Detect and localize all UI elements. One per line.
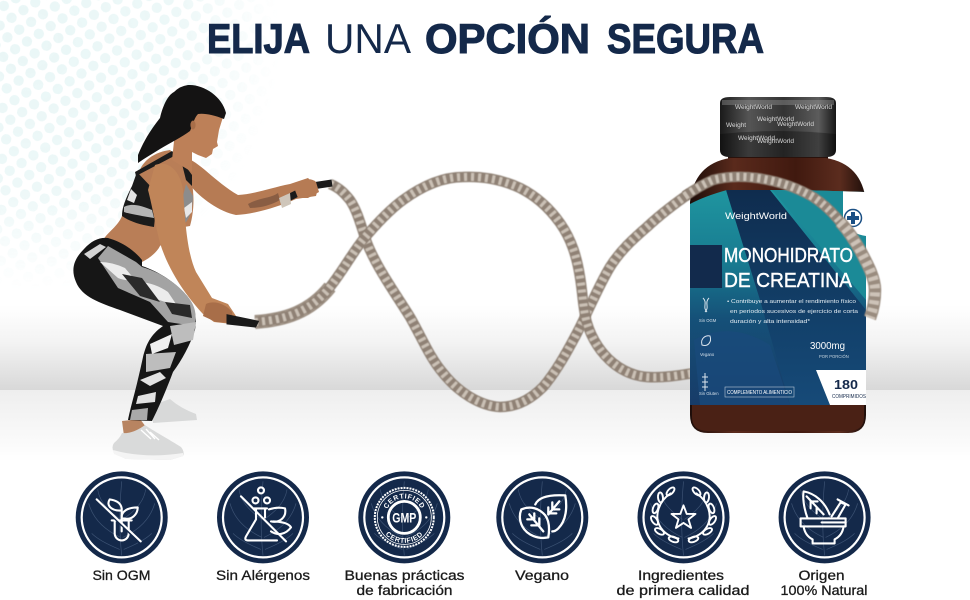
bottle text: COMPLEMENTO ALIMENTICIO	[727, 390, 792, 396]
bottle text: duración y alta intensidad*	[730, 319, 811, 325]
bottle text: Vegano	[700, 352, 715, 357]
bottle glass	[690, 158, 866, 433]
label: Buenas prácticas de fabricación: Buenas prácticas	[344, 568, 465, 583]
label: Sin Alérgenos: Sin Alérgenos	[216, 568, 310, 583]
rope: section crossing over the bottle	[685, 177, 875, 318]
icon: test tube with leaves crossed out	[96, 499, 141, 542]
torso	[103, 150, 193, 262]
rope grips	[228, 316, 257, 326]
bottle label	[690, 188, 866, 406]
hand on lower rope	[203, 302, 233, 323]
label: Ingredientes de primera calidad: de primera calidad	[616, 583, 750, 598]
bottle cap	[720, 97, 836, 164]
badge: Sin Alérgenos	[218, 473, 308, 562]
hand on upper rope	[293, 179, 319, 198]
title	[207, 15, 764, 62]
sports bra	[122, 151, 193, 227]
bottle text: 3000mg	[810, 341, 845, 352]
label: Origen 100% Natural: Origen	[798, 568, 844, 583]
rope: strand from upper hand, behind the other strand	[330, 184, 690, 407]
leggings	[73, 238, 196, 421]
front shoe	[112, 419, 184, 460]
badge: Ingredientes de primera calidad	[639, 473, 728, 562]
lower arm	[148, 164, 236, 324]
title: ELIJA	[207, 15, 310, 62]
back shoe	[153, 399, 197, 423]
label: Sin OGM: Sin OGM	[92, 568, 150, 583]
bottle text: Sin OGM	[699, 318, 717, 323]
badge: Vegano	[498, 473, 587, 562]
badge: Origen 100% Natural	[780, 473, 869, 562]
label: Ingredientes de primera calidad: Ingredientes	[638, 568, 724, 583]
bottle cap: WeightWorld	[738, 135, 775, 142]
badge: Buenas prácticas de fabricación	[358, 471, 450, 564]
label: Origen 100% Natural	[780, 568, 868, 598]
bottle text: WeightWorld	[725, 211, 787, 222]
icon: flask and leaves crossed out	[241, 487, 291, 541]
bottle cap: Weight	[726, 122, 746, 129]
rope: strand from lower hand, going behind bottle	[255, 177, 700, 377]
title: SEGURA	[607, 15, 764, 62]
leggings: camouflage pattern	[84, 244, 196, 420]
bottle text: en periodos sucesivos de ejercicio de corta	[730, 309, 859, 315]
bottle cap: WeightWorld	[757, 116, 794, 123]
extended arm	[185, 158, 318, 215]
label: Ingredientes de primera calidad	[616, 568, 750, 598]
icon: mortar, pestle and leaf	[801, 491, 849, 543]
title: UNA	[325, 15, 411, 62]
bottle text: • Contribuye a aumentar el rendimiento físico	[727, 299, 856, 305]
bottle text: POR PORCIÓN	[819, 354, 849, 359]
icon: star inside a laurel wreath	[650, 486, 717, 543]
bottle text: MONOHIDRATO	[724, 245, 853, 267]
badge: Buenas prácticas de fabricación: CERTIFIED	[386, 532, 422, 543]
icon: two leaves	[520, 495, 566, 538]
product bottle	[690, 97, 867, 433]
label: Buenas prácticas de fabricación	[344, 568, 465, 598]
icon: GMP certified stamp	[375, 488, 434, 547]
badge: Buenas prácticas de fabricación: CERTIFIED	[384, 494, 424, 508]
bottle text: Sin Gluten	[699, 391, 719, 396]
label: Buenas prácticas de fabricación: de fabricación	[356, 583, 452, 598]
badge row	[76, 471, 871, 564]
head and neck	[172, 108, 223, 172]
bottle cap: WeightWorld	[735, 104, 772, 111]
background: studio wall and floor	[0, 0, 970, 428]
athlete	[73, 85, 332, 460]
badge: Sin OGM	[77, 473, 166, 562]
180 tablets tag	[816, 370, 866, 405]
bottle text: COMPRIMIDOS	[832, 394, 867, 400]
bottle text	[699, 211, 867, 400]
bottle text: 180	[834, 378, 858, 392]
bottle cap: WeightWorld	[777, 121, 814, 128]
small label icons	[702, 298, 711, 391]
badge on label	[843, 190, 866, 236]
bottle cap: WeightWorld	[757, 138, 794, 145]
bottle text: DE CREATINA	[724, 270, 853, 292]
badge: Buenas prácticas de fabricación: GMP	[392, 509, 416, 525]
hair and ponytail	[138, 85, 226, 163]
label: Vegano: Vegano	[515, 568, 569, 583]
bottle cap: WeightWorld	[795, 104, 832, 111]
label: Origen 100% Natural: 100% Natural	[780, 583, 868, 598]
title: OPCIÓN	[425, 15, 590, 62]
badge labels	[92, 568, 868, 598]
